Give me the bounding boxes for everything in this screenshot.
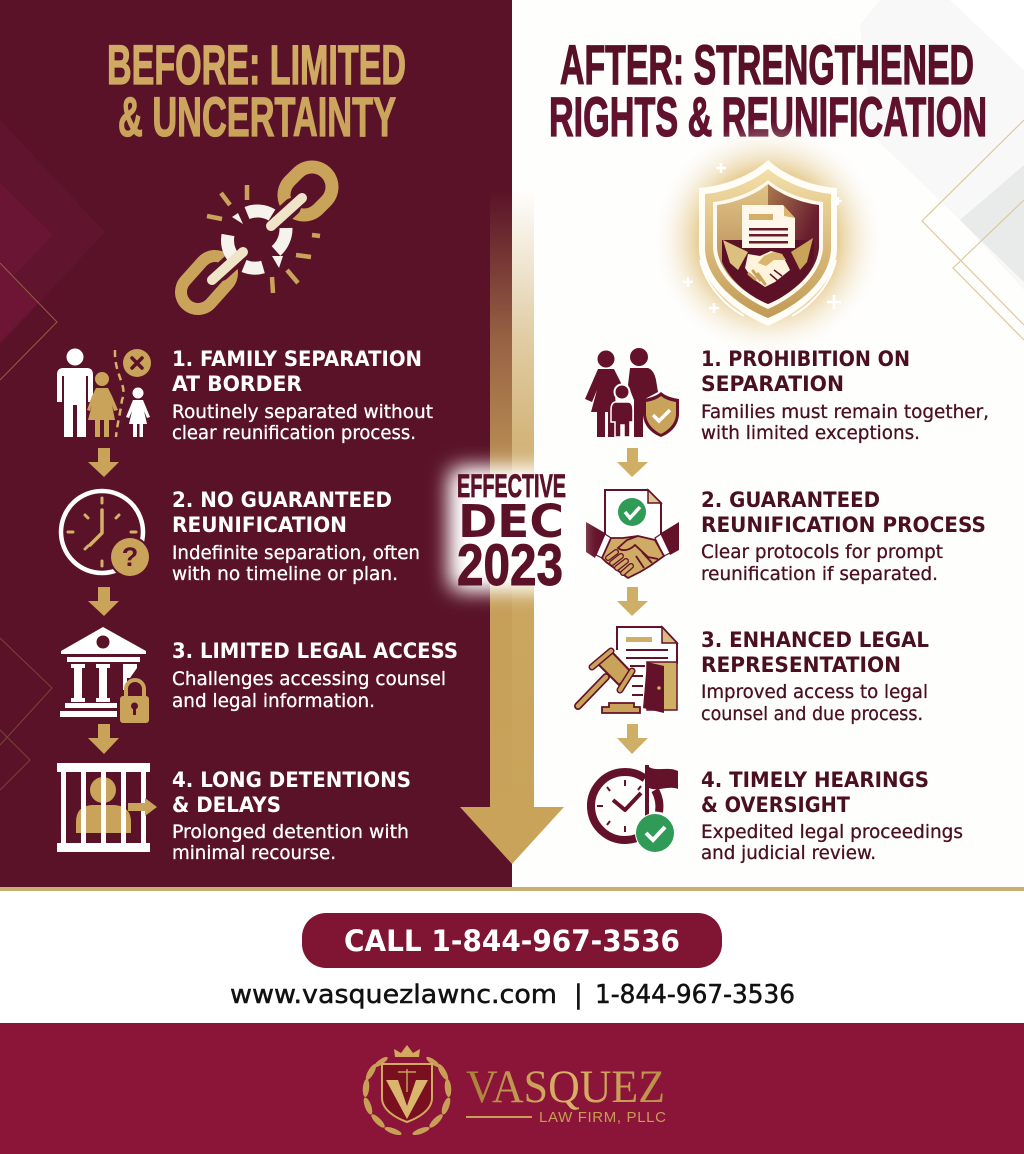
text: enhanced legal representation — [701, 628, 929, 725]
contact line: www.vasquezlawnc.com — [230, 980, 557, 1010]
callout: effective date: 2023 — [457, 533, 563, 598]
icon: broken chain — [198, 185, 320, 293]
logo: wordmark: VASQUEZ — [466, 1061, 665, 1113]
text: enhanced legal representation: 3. ENHANCED LEGAL — [701, 628, 929, 652]
text: limited legal access: Challenges accessing counsel — [172, 668, 446, 690]
item 3: enhanced legal representation — [578, 627, 929, 725]
text: enhanced legal representation: counsel and due process. — [701, 703, 923, 725]
item 1: family separation — [57, 347, 433, 444]
text: guaranteed reunification: reunification if separated. — [701, 563, 938, 585]
arrow: step 1 to 2 — [88, 448, 119, 477]
text: limited legal access: 3. LIMITED LEGAL ACCESS — [172, 639, 458, 663]
icon: legal shield — [650, 122, 886, 358]
callout: effective date — [450, 468, 575, 598]
arrow: step 3 to 4 — [617, 724, 648, 754]
text: no guaranteed reunification — [172, 488, 420, 585]
text: prohibition on separation: Families must remain together, — [701, 401, 989, 423]
arrow: step 2 to 3 — [88, 587, 119, 616]
text: timely hearings: 4. TIMELY HEARINGS — [701, 768, 929, 792]
text: long detentions: minimal recourse. — [172, 842, 336, 864]
panel: after list — [578, 347, 989, 864]
text: no guaranteed reunification: REUNIFICATION — [172, 513, 347, 537]
text: timely hearings: & OVERSIGHT — [701, 793, 851, 817]
text: timely hearings: Expedited legal proceedings — [701, 821, 963, 843]
arrow: step 3 to 4 — [88, 724, 119, 754]
contact line: 1-844-967-3536 — [595, 980, 795, 1010]
panel: before background — [0, 0, 512, 888]
item 2: no guaranteed reunification — [61, 488, 420, 585]
text: family separation: clear reunification process. — [172, 422, 416, 444]
text: long detentions: & DELAYS — [172, 793, 281, 817]
icon: courthouse with padlock — [60, 627, 149, 723]
text: family separation: AT BORDER — [172, 372, 302, 396]
panel: footer — [0, 1023, 1024, 1154]
heading: after — [549, 33, 987, 148]
item 4: long detentions — [57, 763, 411, 864]
callout: effective date: DEC — [458, 495, 564, 548]
icon: clock with question mark — [61, 491, 151, 578]
text: guaranteed reunification: 2. GUARANTEED — [701, 488, 880, 512]
heading: before: & UNCERTAINTY — [118, 85, 396, 148]
text: guaranteed reunification — [701, 488, 986, 585]
text: family separation — [172, 347, 433, 444]
text: long detentions — [172, 768, 411, 864]
text: prohibition on separation: with limited exceptions. — [701, 422, 920, 444]
text: family separation: 1. FAMILY SEPARATION — [172, 347, 422, 371]
text: prohibition on separation — [701, 347, 989, 444]
text: guaranteed reunification: Clear protocols for prompt — [701, 541, 943, 563]
icon: jail cell — [57, 763, 157, 852]
heading: before: BEFORE: LIMITED — [107, 33, 406, 96]
central timeline arrow — [460, 190, 564, 864]
panel: after background — [512, 0, 1024, 888]
contact line: | — [574, 980, 583, 1010]
callout: effective date: EFFECTIVE — [457, 468, 566, 504]
text: timely hearings — [701, 768, 963, 864]
text: long detentions: 4. LONG DETENTIONS — [172, 768, 411, 792]
text: enhanced legal representation: REPRESENTATION — [701, 653, 901, 677]
logo: crest — [362, 1045, 452, 1137]
text: prohibition on separation: SEPARATION — [701, 372, 844, 396]
text: enhanced legal representation: Improved access to legal — [701, 681, 928, 703]
icon: protected family — [585, 348, 679, 437]
text: prohibition on separation: 1. PROHIBITION ON — [701, 347, 910, 371]
item 2: guaranteed reunification — [586, 488, 986, 585]
item 3: limited legal access — [60, 627, 458, 723]
icon: handshake with approved document — [586, 490, 679, 578]
call button — [302, 913, 722, 968]
icon: clock with question mark: ? — [122, 542, 138, 572]
item 1: prohibition on separation — [585, 347, 989, 444]
text: timely hearings: and judicial review. — [701, 842, 876, 864]
contact line — [230, 980, 795, 1010]
text: no guaranteed reunification: with no timeline or plan. — [172, 563, 398, 585]
text: limited legal access: and legal information. — [172, 690, 375, 712]
arrow: step 2 to 3 — [617, 587, 648, 616]
item 4: timely hearings — [591, 765, 963, 864]
panel: contact band — [0, 891, 1024, 1023]
arrow: step 1 to 2 — [617, 448, 648, 477]
icon: clock, flag and check — [591, 765, 678, 853]
text: no guaranteed reunification: Indefinite separation, often — [172, 542, 420, 564]
text: no guaranteed reunification: 2. NO GUARANTEED — [172, 488, 392, 512]
text: family separation: Routinely separated without — [172, 401, 433, 423]
call button: CALL 1-844-967-3536 — [344, 924, 680, 958]
panel: before list — [57, 347, 458, 864]
icon: gavel, document and door — [578, 627, 677, 713]
text: long detentions: Prolonged detention with — [172, 821, 409, 843]
icon: separated family — [57, 348, 151, 437]
text: limited legal access — [172, 639, 458, 712]
gold divider — [0, 887, 1024, 891]
heading: before — [107, 33, 406, 148]
logo: wordmark: LAW FIRM, PLLC — [539, 1109, 666, 1126]
text: guaranteed reunification: REUNIFICATION PROCESS — [701, 513, 986, 537]
